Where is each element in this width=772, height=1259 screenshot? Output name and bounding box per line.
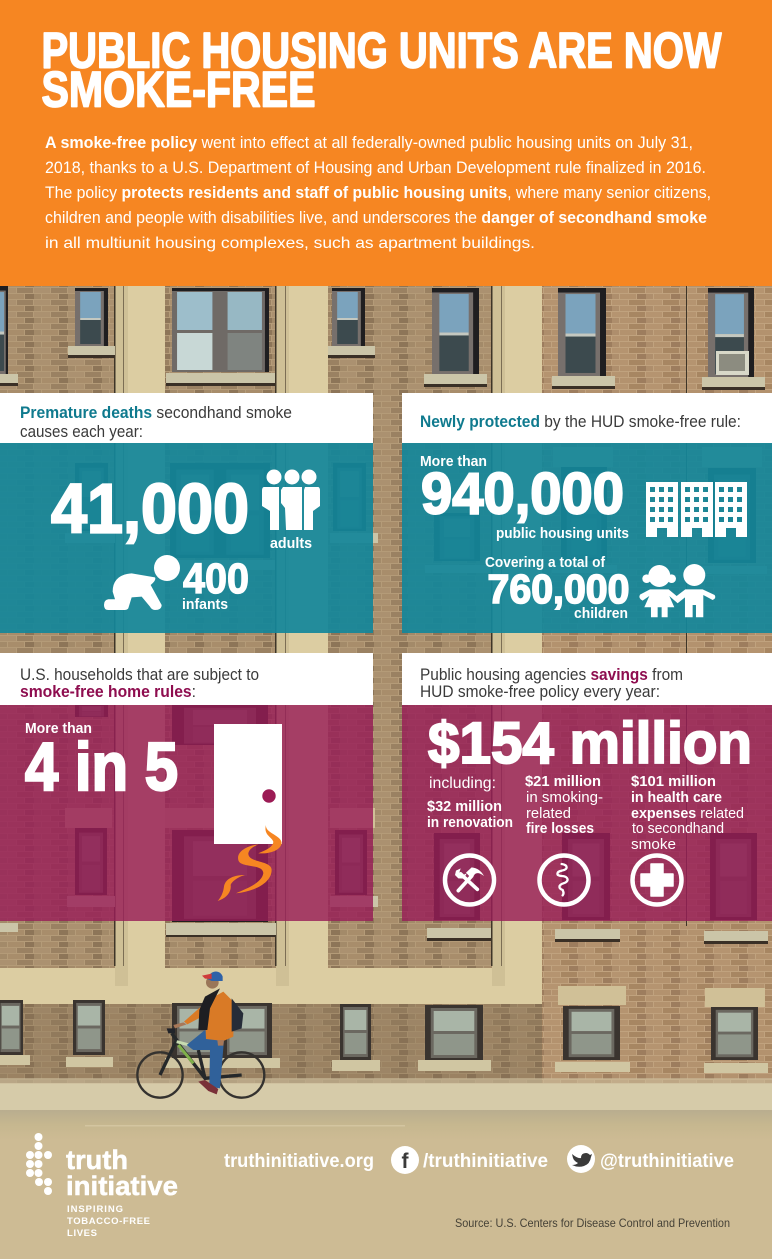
label: covering a total of: Covering a total of bbox=[485, 555, 605, 571]
link: twitter bbox=[567, 1145, 734, 1173]
column: fire losses: fire losses bbox=[526, 821, 594, 837]
tagline: INSPIRING bbox=[67, 1204, 123, 1215]
heading: home rules: smoke-free home rules: bbox=[20, 682, 196, 701]
heading: premature deaths: causes each year: bbox=[20, 422, 143, 441]
column: health care bbox=[631, 774, 744, 853]
stat: 41,000: 41,000 bbox=[51, 470, 249, 548]
sidewalk and road bbox=[0, 1083, 772, 1110]
link: facebook bbox=[391, 1146, 548, 1174]
photo background: brick building bbox=[0, 286, 772, 1259]
column: health care: $101 million bbox=[631, 774, 716, 790]
heading: savings: Public housing agencies savings from bbox=[420, 665, 683, 684]
intro text: 2018, thanks to a U.S. Department of Housing and Urban Development rule finalized in 2016. bbox=[45, 158, 706, 177]
icon: medical cross bbox=[632, 856, 682, 904]
label: including: including: bbox=[429, 775, 496, 792]
label: more than: More than bbox=[25, 721, 92, 737]
wordmark bbox=[66, 1145, 178, 1201]
wordmark: truth bbox=[66, 1145, 128, 1175]
stat: 400: 400 bbox=[183, 555, 249, 603]
title bbox=[42, 22, 722, 118]
panel: premature deaths bbox=[0, 393, 373, 633]
icon: door with smoke bbox=[214, 724, 282, 901]
stat: 4 in 5: 4 in 5 bbox=[25, 729, 178, 805]
stat: 940,000: 940,000 bbox=[421, 462, 624, 526]
windows row 2 bbox=[75, 463, 108, 531]
intro text bbox=[45, 133, 711, 252]
source: Source: U.S. Centers for Disease Control and Prevention bbox=[455, 1216, 730, 1230]
label: public housing units: public housing units bbox=[496, 526, 629, 542]
cyclist bbox=[137, 972, 264, 1098]
panel: newly protected bbox=[402, 393, 772, 633]
label: infants: infants bbox=[182, 597, 228, 613]
icon: logo dots bbox=[26, 1133, 52, 1195]
label: adults: adults bbox=[270, 536, 312, 552]
panel: savings bbox=[402, 653, 772, 921]
stat: 760,000: 760,000 bbox=[488, 566, 630, 612]
column: health care: expenses related bbox=[631, 806, 744, 822]
intro text: A smoke-free policy went into effect at all federally-owned public housing units on July 31, bbox=[45, 133, 693, 152]
column: renovation bbox=[427, 799, 513, 831]
intro text: children and people with disabilities live, and underscores the danger of secondhand smoke bbox=[45, 208, 707, 227]
tagline: TOBACCO-FREE bbox=[67, 1216, 150, 1227]
icon: infant bbox=[104, 555, 180, 610]
label: children: children bbox=[574, 606, 628, 622]
link: twitter: @truthinitiative bbox=[600, 1151, 734, 1172]
windows row 1 bbox=[0, 286, 8, 374]
icon: adults bbox=[262, 470, 320, 530]
column: health care: smoke bbox=[631, 837, 676, 853]
column: fire losses: in smoking- bbox=[526, 790, 603, 806]
stat: $154 million: $154 million bbox=[428, 711, 752, 776]
windows row 3 bbox=[75, 705, 108, 717]
link: website: truthinitiative.org bbox=[224, 1151, 374, 1172]
logo: truth initiative bbox=[26, 1133, 178, 1239]
column: health care: in health care bbox=[631, 790, 722, 806]
intro text: The policy protects residents and staff of public housing units, where many senior citizens, bbox=[45, 183, 711, 202]
heading: premature deaths bbox=[20, 403, 292, 441]
tagline bbox=[67, 1204, 150, 1239]
column: fire losses: $21 million bbox=[525, 774, 601, 790]
column: fire losses bbox=[525, 774, 603, 837]
link: facebook: f bbox=[402, 1150, 410, 1173]
icon: smoke bbox=[540, 856, 588, 904]
header band bbox=[0, 0, 772, 286]
column: renovation: in renovation bbox=[427, 815, 513, 831]
heading: premature deaths: Premature deaths secondhand smoke bbox=[20, 403, 292, 422]
heading: home rules bbox=[20, 665, 259, 701]
title: SMOKE-FREE bbox=[42, 62, 316, 118]
wordmark: initiative bbox=[66, 1171, 178, 1201]
heading: savings: HUD smoke-free policy every year: bbox=[420, 682, 660, 701]
tagline: LIVES bbox=[67, 1228, 97, 1239]
link: facebook: /truthinitiative bbox=[423, 1151, 548, 1172]
heading: home rules: U.S. households that are subject to bbox=[20, 665, 259, 684]
heading: newly protected: Newly protected by the HUD smoke-free rule: bbox=[420, 412, 741, 431]
sills bbox=[0, 346, 768, 941]
column: health care: to secondhand bbox=[632, 821, 724, 837]
intro text: in all multiunit housing complexes, such as apartment buildings. bbox=[45, 235, 535, 252]
icon: apartment buildings bbox=[646, 482, 747, 537]
windows row 4 bbox=[0, 1000, 23, 1055]
heading: savings bbox=[420, 665, 683, 701]
icon: tools bbox=[445, 856, 494, 904]
label: more than: More than bbox=[420, 454, 487, 470]
icon: children holding hands bbox=[639, 564, 715, 617]
panel: smoke-free home rules bbox=[0, 653, 373, 921]
column: renovation: $32 million bbox=[427, 799, 502, 815]
column: fire losses: related bbox=[526, 806, 571, 822]
